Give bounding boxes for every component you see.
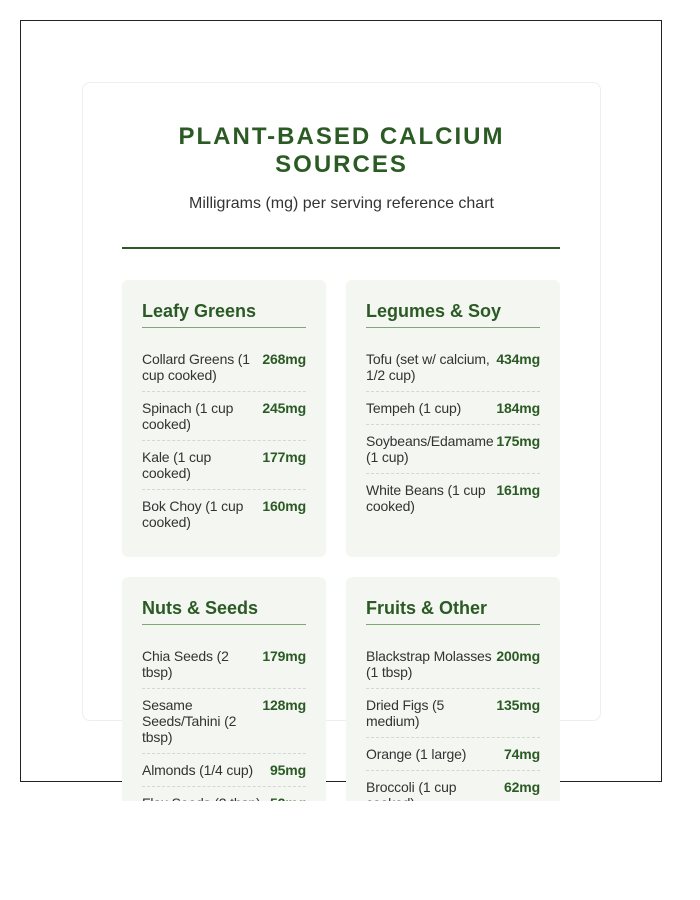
list: leafy greens: Bok Choy (1 cup cooked) (142, 498, 243, 530)
subtitle: Milligrams (mg) per serving reference chart (189, 195, 494, 212)
list: fruits: 135mg (496, 697, 540, 713)
list: leafy greens: 245mg (262, 400, 306, 416)
list: legumes: Soybeans/Edamame (1 cup) (366, 433, 494, 465)
list: fruits: Dried Figs (5 medium) (366, 697, 444, 729)
list: fruits: Blackstrap Molasses (1 tbsp) (366, 648, 492, 680)
list: leafy greens: 160mg (262, 498, 306, 514)
title: PLANT-BASED CALCIUM (178, 123, 504, 150)
list: fruits: 74mg (504, 746, 540, 762)
list: nuts: 95mg (270, 762, 306, 778)
list: legumes: 184mg (496, 400, 540, 416)
list: legumes: 434mg (496, 351, 540, 367)
list: nuts: 179mg (262, 648, 306, 664)
list: leafy greens: 177mg (262, 449, 306, 465)
list: fruits: 200mg (496, 648, 540, 664)
list: fruits (366, 648, 540, 801)
list: nuts: Chia Seeds (2 tbsp) (142, 648, 229, 680)
list: legumes: Tofu (set w/ calcium, 1/2 cup) (366, 351, 490, 383)
list: fruits: 62mg (504, 779, 540, 795)
title (178, 123, 504, 178)
list: nuts (142, 648, 306, 801)
list: legumes: White Beans (1 cup cooked) (366, 482, 485, 514)
title: SOURCES (275, 151, 408, 178)
list: fruits: Orange (1 large) (366, 746, 466, 762)
panel: fruits & other (346, 577, 560, 877)
heading: legumes (366, 300, 540, 328)
list: nuts: Sesame Seeds/Tahini (2 tbsp) (142, 697, 236, 745)
list: legumes (366, 351, 540, 514)
outer frame (20, 20, 662, 782)
list: nuts: 128mg (262, 697, 306, 713)
heading: nuts (142, 597, 306, 625)
panel: legumes & soy (346, 280, 560, 557)
list: leafy greens: Kale (1 cup cooked) (142, 449, 211, 481)
list: leafy greens: Spinach (1 cup cooked) (142, 400, 233, 432)
heading: fruits: Fruits & Other (366, 598, 487, 618)
list: legumes: 175mg (496, 433, 540, 449)
heading: nuts: Nuts & Seeds (142, 598, 258, 618)
list: legumes: 161mg (496, 482, 540, 498)
list: leafy greens (142, 351, 306, 530)
panel: leafy greens (122, 280, 326, 557)
heading: fruits (366, 597, 540, 625)
list: leafy greens: Collard Greens (1 cup cooked) (142, 351, 250, 383)
panel: nuts & seeds (122, 577, 326, 877)
heading: leafy greens (142, 300, 306, 328)
list: leafy greens: 268mg (262, 351, 306, 367)
heading: legumes: Legumes & Soy (366, 301, 501, 321)
card background (82, 82, 601, 721)
heading: leafy greens: Leafy Greens (142, 301, 256, 321)
list: legumes: Tempeh (1 cup) (366, 400, 461, 416)
list: nuts: Almonds (1/4 cup) (142, 762, 253, 778)
